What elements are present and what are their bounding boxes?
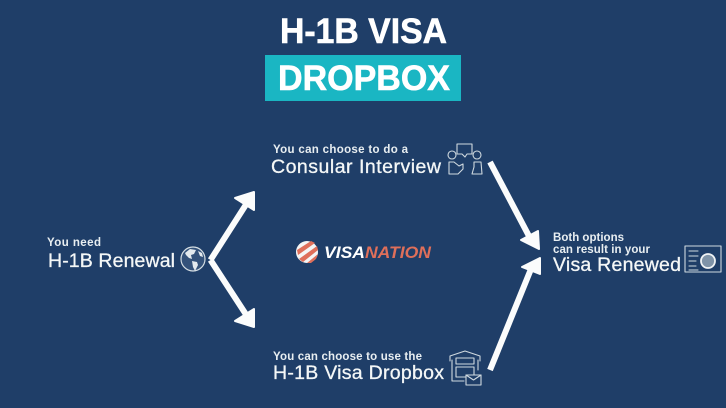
text: you need H-1B renewal: You need [47, 237, 101, 249]
text: dropbox option: You can choose to use the [273, 351, 422, 363]
logo: visanation [296, 241, 432, 263]
icon: dropbox with envelope [450, 351, 481, 385]
text: both options result: Visa Renewed [553, 254, 681, 276]
text: dropbox option: H-1B Visa Dropbox [273, 362, 444, 384]
subtitle badge: dropbox: DROPBOX [278, 59, 451, 98]
logo wordmark: VISANATION [324, 243, 432, 262]
text: consular interview [271, 144, 442, 178]
text: consular interview: Consular Interview [271, 156, 442, 178]
text: consular interview: You can choose to do a [273, 144, 409, 156]
icon: interview people [448, 144, 482, 174]
text: you need H-1B renewal: H-1B Renewal [48, 250, 175, 272]
logo globe [296, 241, 318, 263]
text: you need H-1B renewal [47, 237, 175, 272]
text: dropbox option [273, 351, 444, 384]
icon: passport visa stamp [685, 246, 721, 272]
text: both options result: Both options [553, 232, 624, 244]
arrow: renewal to consular interview and dropbox [210, 192, 254, 327]
text: both options result [553, 232, 681, 276]
arrow: consular interview to visa renewed [490, 162, 539, 249]
text: both options result: can result in your [553, 244, 651, 256]
icon: globe [181, 247, 205, 271]
arrow: dropbox to visa renewed [490, 258, 540, 370]
title: H-1B VISA [280, 12, 447, 51]
